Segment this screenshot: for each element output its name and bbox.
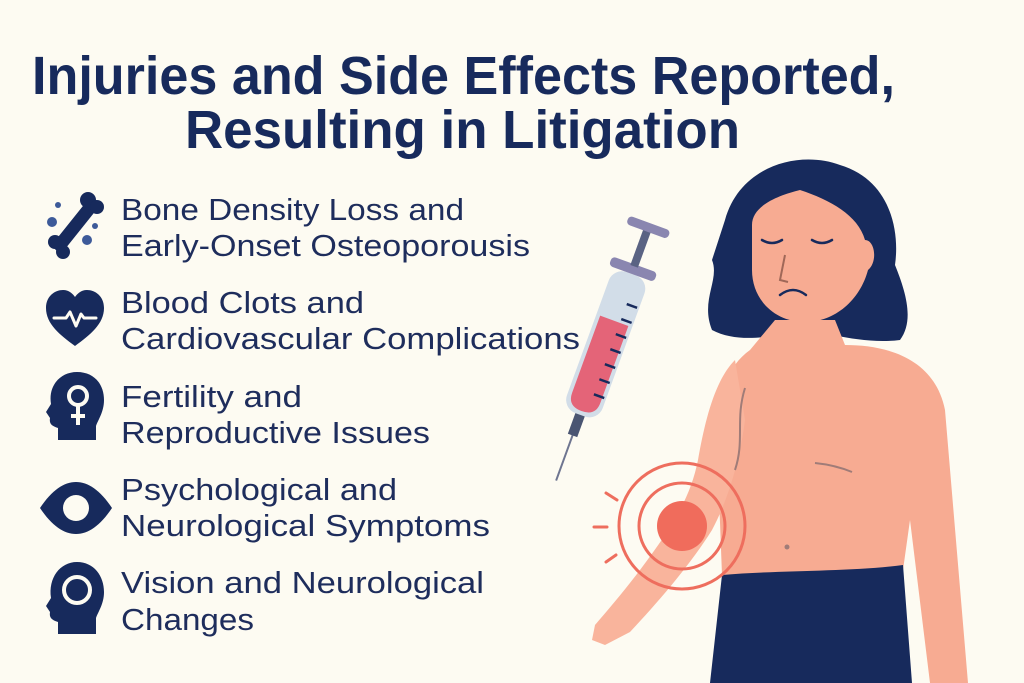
arm: [592, 360, 745, 645]
item: blood clots: Blood Clots and: [121, 285, 364, 320]
list: injuries: [121, 192, 580, 637]
illustration: woman: [592, 160, 968, 683]
icon: heart: [46, 290, 104, 346]
face features: [762, 240, 832, 295]
item: blood clots: [121, 285, 580, 356]
item: bone density: Early-Onset Osteoporousis: [121, 228, 530, 263]
pain indicator: [594, 463, 745, 589]
icon: bone: [47, 192, 104, 259]
icon: head with vision circle: [46, 562, 104, 634]
item: vision: [121, 565, 484, 637]
item: bone density: [121, 192, 530, 263]
icon: head with female symbol: [46, 372, 104, 440]
title: [32, 46, 895, 160]
pants: [710, 565, 912, 683]
item: vision: Changes: [121, 602, 254, 637]
item: bone density: Bone Density Loss and: [121, 192, 464, 227]
item: fertility: Reproductive Issues: [121, 415, 430, 450]
icon: eye: [40, 482, 112, 534]
face: [752, 190, 874, 322]
item: blood clots: Cardiovascular Complications: [121, 321, 580, 356]
body torso: [716, 320, 968, 683]
title: Injuries and Side Effects Reported,: [32, 46, 895, 106]
item: vision: Vision and Neurological: [121, 565, 484, 600]
title: Resulting in Litigation: [185, 100, 740, 160]
item: psychological: Psychological and: [121, 472, 397, 507]
hair: [708, 160, 908, 341]
item: psychological: [121, 472, 490, 543]
item: fertility: [121, 379, 430, 450]
item: psychological: Neurological Symptoms: [121, 508, 490, 543]
item: fertility: Fertility and: [121, 379, 302, 414]
illustration: syringe: [534, 215, 672, 489]
